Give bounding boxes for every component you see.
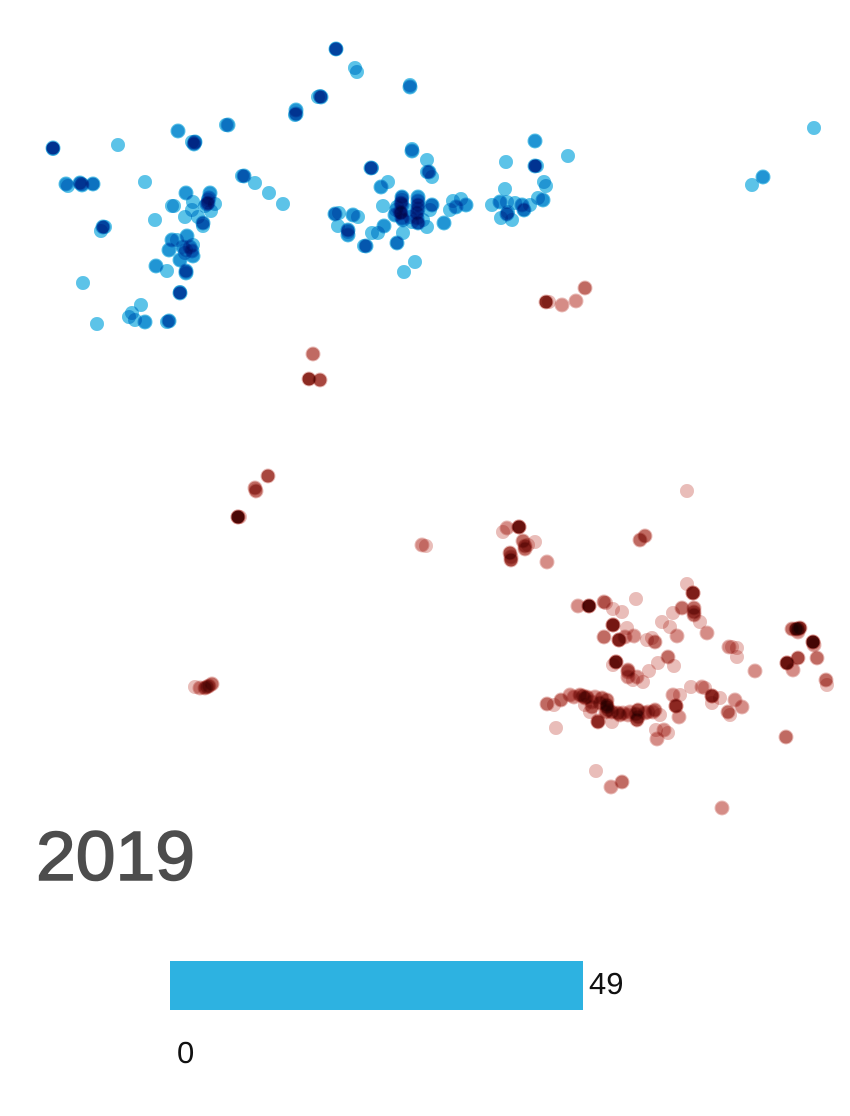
- year heading: 2019: [36, 817, 195, 895]
- scatter: blue points: [46, 42, 821, 331]
- legend bar: [170, 961, 583, 1010]
- legend max label: 49: [589, 966, 623, 1001]
- scatter: red points: [188, 282, 834, 814]
- legend min label: 0: [177, 1035, 194, 1070]
